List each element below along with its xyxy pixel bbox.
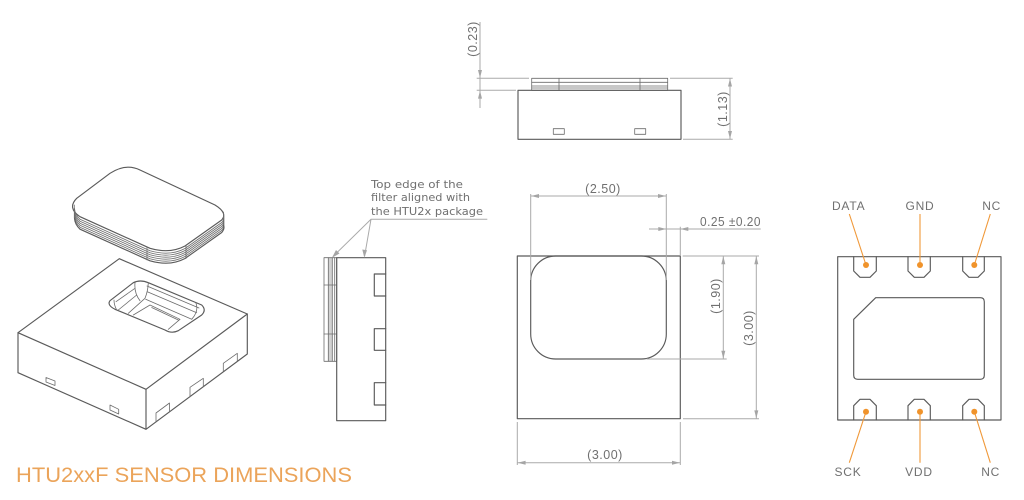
package body — [518, 90, 681, 139]
filter side — [324, 258, 337, 361]
dimension 3.00 vertical: (3.00) — [742, 310, 756, 346]
title: HTU2xxF SENSOR DIMENSIONS — [16, 464, 352, 487]
isometric filter cap — [73, 167, 224, 263]
dimension 0.25 — [649, 215, 761, 256]
pin labels: DATA — [832, 199, 865, 213]
dimension 1.13 — [670, 78, 733, 139]
dimension 3.00 vertical — [683, 256, 759, 419]
filter profile — [532, 78, 668, 90]
notches — [374, 274, 386, 405]
dimension 3.00 horizontal — [517, 422, 680, 465]
pin dots — [863, 262, 977, 415]
gray filter band — [328, 258, 332, 361]
package outline — [838, 257, 1001, 420]
dimension 1.13: (1.13) — [716, 91, 730, 127]
pin labels — [832, 199, 1001, 479]
pin labels: NC — [981, 465, 1000, 479]
orange leader lines — [849, 214, 990, 463]
annotation text: the HTU2x package — [371, 206, 483, 218]
pin labels: GND — [905, 199, 935, 213]
dimension 0.23: (0.23) — [466, 21, 480, 57]
front view — [517, 182, 761, 465]
dimension 3.00 horizontal: (3.00) — [587, 448, 623, 462]
leader lines — [332, 219, 487, 258]
isometric sensor package — [18, 259, 247, 429]
filter window — [531, 256, 666, 359]
package pads — [46, 353, 237, 422]
contact pads — [854, 257, 984, 420]
dimension 2.50: (2.50) — [585, 182, 621, 196]
dimension 2.50 — [531, 182, 666, 280]
pin labels: VDD — [905, 465, 933, 479]
pads — [553, 129, 646, 134]
dimension 1.90: (1.90) — [709, 278, 723, 314]
die pad — [854, 298, 984, 379]
pinout view — [832, 199, 1001, 479]
dimension 0.23 — [466, 21, 529, 108]
annotation text: Top edge of the — [370, 179, 463, 191]
side view — [324, 179, 487, 421]
dimension 1.90 — [647, 256, 759, 359]
sensor cavity — [109, 281, 204, 332]
pin labels: SCK — [834, 465, 862, 479]
dimension 0.25: 0.25 ±0.20 — [700, 215, 761, 229]
top elevation view — [466, 21, 733, 139]
package body — [517, 256, 680, 419]
body — [337, 258, 386, 421]
annotation text — [370, 179, 483, 218]
pin labels: NC — [982, 199, 1001, 213]
annotation text: filter aligned with — [371, 192, 470, 204]
